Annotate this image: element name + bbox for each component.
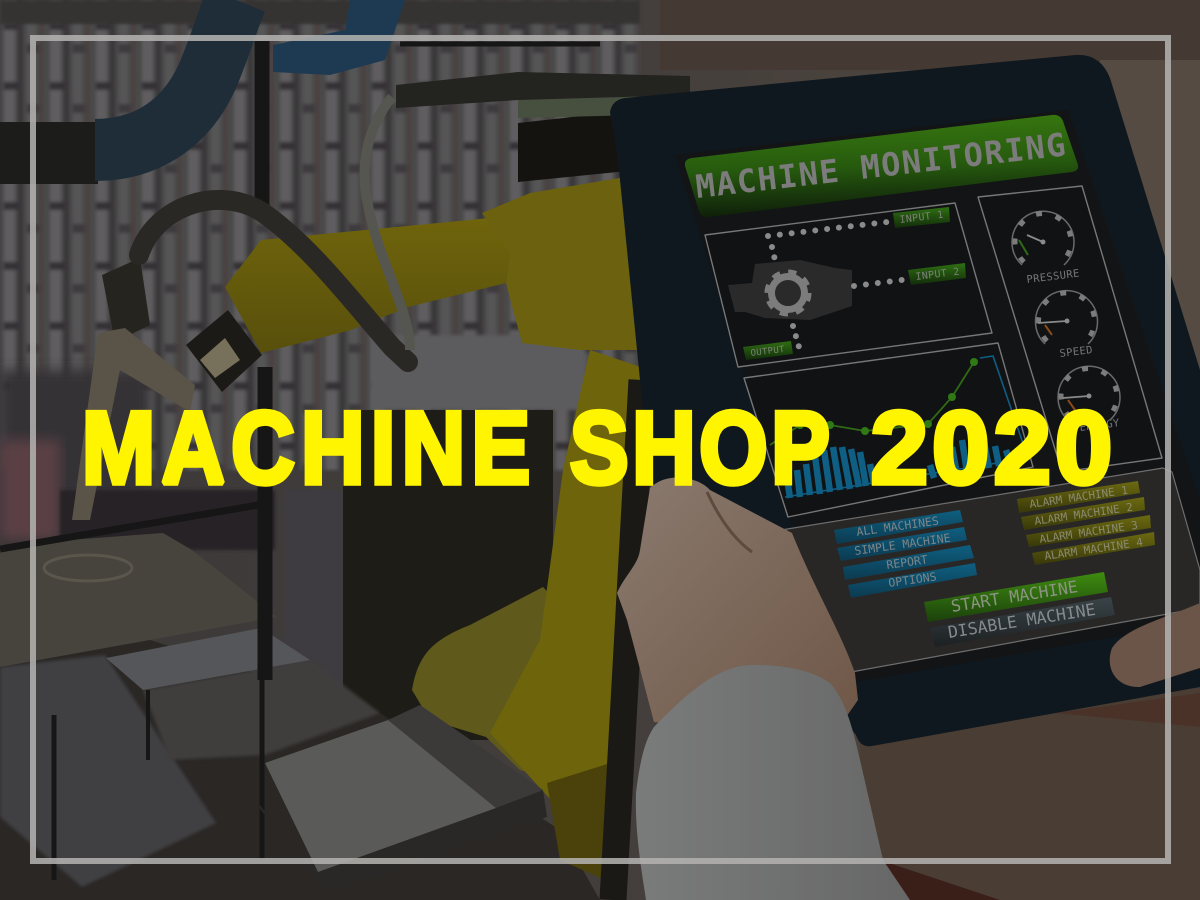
table top <box>0 533 277 667</box>
header bar: MACHINE MONITORING <box>694 125 1067 206</box>
robot arm <box>72 72 690 883</box>
blue menu buttons: REPORT <box>885 552 929 572</box>
alarm buttons: ALARM MACHINE 3 <box>1039 519 1139 546</box>
end effector <box>186 310 262 392</box>
gauge: pressure <box>1012 211 1080 286</box>
alarm buttons: ALARM MACHINE 4 <box>1044 536 1144 563</box>
alarm buttons <box>1017 481 1155 565</box>
axes <box>785 356 1028 497</box>
alarm buttons: ALARM MACHINE 2 <box>1034 501 1134 528</box>
label: input 1 <box>893 207 950 228</box>
palm behind tablet <box>1056 693 1200 727</box>
black control box on arm <box>518 110 637 182</box>
overhead pipe <box>273 0 405 75</box>
floor <box>0 640 600 900</box>
blue menu buttons: OPTIONS <box>887 569 937 590</box>
white sleeve <box>636 665 910 900</box>
right thumb <box>1110 603 1200 687</box>
black cable <box>139 200 408 362</box>
panel: engine diagram <box>705 203 992 367</box>
panel: gauges <box>978 186 1162 472</box>
tablet screen <box>675 110 1200 682</box>
label: output: OUTPUT <box>750 345 786 359</box>
gauge: energy <box>1058 366 1121 434</box>
white box on table <box>106 628 310 690</box>
label: input 1: INPUT 1 <box>899 210 944 226</box>
dark post in front of arm <box>613 380 642 900</box>
book on table <box>229 705 547 893</box>
blue menu buttons: ALL MACHINES <box>855 514 940 539</box>
gauge: speed <box>1035 291 1098 360</box>
disable machine button: DISABLE MACHINE <box>947 600 1097 642</box>
title: 2020 <box>871 391 1112 505</box>
grey cable <box>365 97 410 350</box>
bars <box>787 436 1010 498</box>
bright strip <box>490 350 650 810</box>
holding hand <box>617 477 858 740</box>
disable machine button <box>930 597 1115 647</box>
blue menu buttons <box>834 510 977 598</box>
line series <box>770 358 978 445</box>
title <box>82 391 1112 506</box>
rails and posts <box>0 41 600 880</box>
blue menu buttons: SIMPLE MACHINE <box>853 531 951 558</box>
start machine button: START MACHINE <box>950 577 1079 616</box>
dark duct section <box>0 122 98 184</box>
start machine button <box>924 572 1108 622</box>
tablet body <box>610 55 1200 746</box>
label: input 2 <box>908 263 966 285</box>
dotted connectors <box>768 222 902 347</box>
gauge: pressure: PRESSURE <box>1026 268 1080 286</box>
icon: engine with gear <box>728 260 852 320</box>
gauge: speed: SPEED <box>1059 344 1093 360</box>
label: output <box>743 341 793 360</box>
panel: line and bar chart <box>744 343 1033 517</box>
finger crease <box>707 492 752 552</box>
gauge: energy: ENERGY <box>1079 417 1121 434</box>
label: input 2: INPUT 2 <box>915 267 960 283</box>
blue duct pipe <box>95 0 236 150</box>
panel: controls <box>775 468 1200 675</box>
title: SHOP <box>570 392 830 506</box>
title: MACHINE <box>82 392 530 506</box>
pale base <box>412 587 600 790</box>
alarm buttons: ALARM MACHINE 1 <box>1029 484 1129 511</box>
